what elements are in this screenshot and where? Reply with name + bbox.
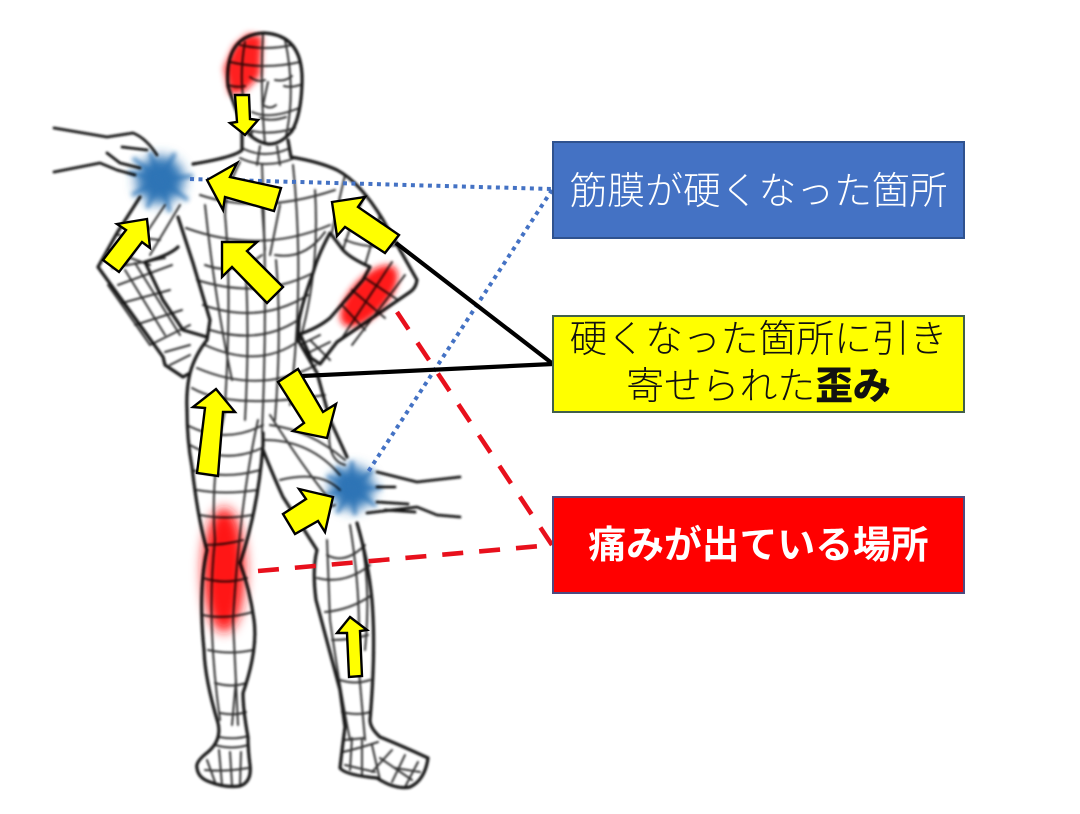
label: location of pain: 痛みが出ている場所 [588, 525, 929, 567]
label: location of pain [552, 496, 965, 594]
arrow: hip to knee [278, 369, 336, 438]
pain area: forearm [330, 256, 408, 336]
body: wireframe figure [54, 33, 460, 788]
arrow: thigh to knee [283, 489, 333, 534]
arrow: upper arm to shoulder [332, 197, 399, 253]
body mesh lines [108, 33, 420, 787]
tight fascia: shoulder [128, 152, 193, 212]
label: strain pulled toward stiff area: 寄せられた歪み [626, 366, 891, 408]
label: tight fascia area: 筋膜が硬くなった箇所 [570, 170, 947, 212]
arrow: arm to shoulder [103, 219, 150, 272]
label: strain pulled toward stiff area: 硬くなった箇所に引き [570, 319, 947, 361]
arrow: temple to jaw [230, 95, 258, 135]
connector: red dashed lines [258, 312, 552, 571]
arrow: calf upward [337, 617, 367, 677]
label: tight fascia area [552, 141, 965, 239]
pain area: head [224, 34, 262, 95]
tight fascia: knee [325, 461, 382, 515]
arrows: yellow strain arrows [103, 95, 399, 677]
body outline [98, 33, 428, 788]
arrow: abdomen to chest [222, 242, 283, 303]
connector: blue dotted lines [190, 179, 552, 472]
arrow: chest to shoulder [207, 163, 281, 211]
hand on knee [367, 472, 460, 517]
connector: black lines [302, 243, 553, 376]
arrow: thigh upward [193, 389, 235, 476]
label: strain pulled toward stiff area [552, 315, 965, 413]
hand on shoulder [54, 128, 157, 175]
pain area: knee [203, 508, 245, 632]
